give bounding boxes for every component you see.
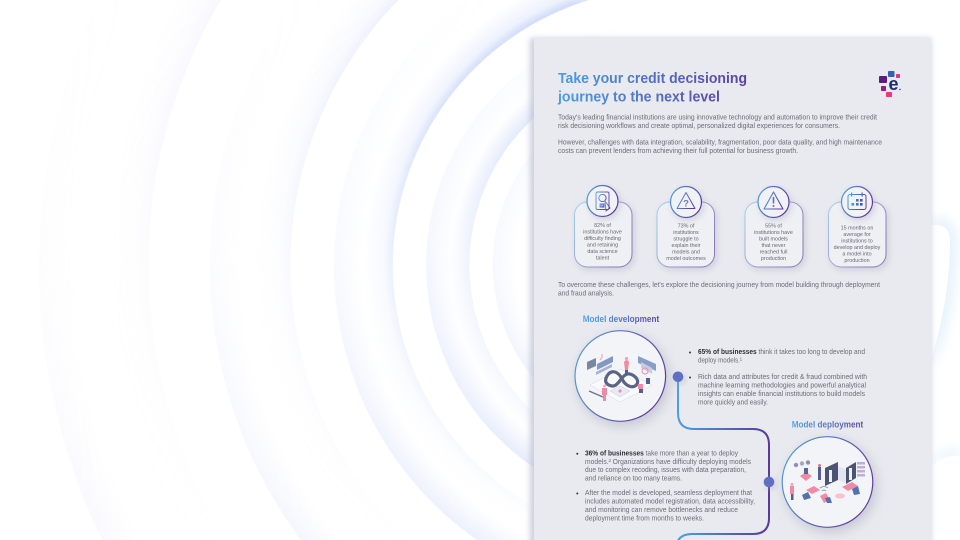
heading: Model deployment: Model deployment bbox=[792, 420, 863, 430]
intro text: However, challenges with data integration, scalability, fragmentation, poor data quality, and high maintenance bbox=[558, 140, 882, 146]
text: 73%: 73% of bbox=[678, 224, 695, 230]
text: 55%: that never bbox=[762, 243, 786, 249]
background: concentric ripple rings bbox=[197, 0, 960, 540]
panel: document page bbox=[530, 38, 931, 540]
text: model deployment bullets: includes automated model registration, data accessibility, bbox=[585, 498, 755, 506]
icon: calendar bbox=[848, 192, 866, 210]
text: model deployment bullets: deployment time from months to weeks. bbox=[585, 515, 704, 522]
text: 82%: talent bbox=[596, 256, 610, 262]
text: model development bullets bbox=[689, 349, 867, 406]
title: journey to the next level bbox=[557, 90, 720, 106]
icon: warning exclamation bbox=[764, 192, 783, 209]
text: 15 months bbox=[834, 226, 881, 264]
text: 15 months: average for bbox=[843, 232, 871, 238]
text: model deployment bullets: due to complex recoding, issues with data preparation, bbox=[585, 467, 746, 474]
illustration: model development circle bbox=[575, 331, 666, 421]
text: transition paragraph bbox=[558, 282, 880, 298]
text: 82%: 82% of bbox=[594, 223, 611, 229]
text: transition paragraph: To overcome these challenges, let's explore the decisioning journey from model building through deployment bbox=[558, 282, 880, 289]
title: Take your credit decisioning bbox=[558, 71, 747, 87]
text: model deployment bullets: After the model is developed, seamless deployment that bbox=[585, 490, 752, 497]
panel: stat card 15 months bbox=[828, 186, 886, 267]
text: model deployment bullets: 36% of businesses take more than a year to deploy bbox=[585, 450, 738, 458]
text: 55%: institutions have bbox=[754, 230, 793, 236]
intro text: costs can prevent lenders from achieving their full potential for business growth. bbox=[558, 148, 798, 155]
text: 55%: reached full bbox=[760, 250, 787, 256]
title bbox=[557, 71, 747, 106]
text: model deployment bullets: and reliance on too many teams. bbox=[585, 476, 682, 482]
text: 73%: model outcomes bbox=[666, 256, 706, 262]
intro text bbox=[558, 114, 882, 155]
text: 82%: difficulty finding bbox=[584, 236, 621, 242]
text: model development bullets: Rich data and attributes for credit & fraud combined with bbox=[698, 374, 867, 381]
text: model development bullets: deploy models.¹ bbox=[698, 358, 743, 364]
text: model deployment bullets bbox=[576, 450, 755, 522]
text: 55%: 55% of bbox=[765, 224, 782, 230]
text: 73% bbox=[666, 224, 706, 262]
text: model deployment bullets: models.² Organizations have difficulty deploying models bbox=[585, 459, 751, 466]
text: 55%: production bbox=[761, 256, 786, 262]
panel: stat card 82% bbox=[574, 186, 632, 267]
text: 55% bbox=[754, 224, 793, 262]
text: 15 months: develop and deploy bbox=[834, 245, 881, 251]
text: 15 months: a model into bbox=[842, 252, 872, 258]
text: 15 months: 15 months on bbox=[841, 226, 873, 232]
icon: warning question: ? bbox=[683, 198, 689, 210]
icon: Experian logo: e bbox=[888, 74, 899, 94]
node: model development bbox=[673, 372, 683, 382]
intro text: risk decisioning workflows and create optimal, personalized digital experiences for consumers. bbox=[558, 123, 840, 130]
intro text: Today's leading financial institutions are using innovative technology and automation to improve their credit bbox=[558, 114, 877, 122]
text: 15 months: institutions to bbox=[841, 238, 873, 244]
text: model development bullets: insights can enable financial institutions to build models bbox=[698, 391, 865, 398]
text: 82% bbox=[583, 223, 622, 262]
text: 73%: institutions bbox=[673, 230, 699, 236]
text: 82%: institutions have bbox=[583, 230, 622, 236]
arrow: journey connector line bbox=[676, 377, 769, 540]
panel: stat card 55% bbox=[745, 186, 803, 267]
text: 82%: data science bbox=[587, 249, 618, 255]
text: 15 months: production bbox=[844, 258, 870, 264]
node: model deployment bbox=[764, 477, 774, 487]
text: model development bullets: 65% of businesses think it takes too long to develop and bbox=[698, 349, 865, 356]
panel: stat card 73% bbox=[657, 186, 714, 267]
text: 73%: models and bbox=[672, 250, 700, 256]
text: 73%: explain their bbox=[671, 243, 701, 249]
text: transition paragraph: and fraud analysis. bbox=[558, 290, 614, 298]
icon: Experian logo bbox=[879, 71, 901, 97]
text: 82%: and retaining bbox=[587, 242, 618, 248]
text: model development bullets: more quickly and easily. bbox=[698, 400, 768, 406]
heading: Model development: Model development bbox=[583, 314, 659, 324]
text: 73%: struggle to bbox=[673, 236, 699, 242]
text: model deployment bullets: and monitoring can remove bottlenecks and reduce bbox=[585, 507, 738, 514]
text: model development bullets: machine learning methodologies and powerful analytical bbox=[698, 382, 866, 390]
icon: document with magnifier bbox=[596, 192, 610, 211]
illustration: model deployment circle bbox=[782, 437, 873, 527]
text: 55%: built models bbox=[759, 236, 788, 242]
